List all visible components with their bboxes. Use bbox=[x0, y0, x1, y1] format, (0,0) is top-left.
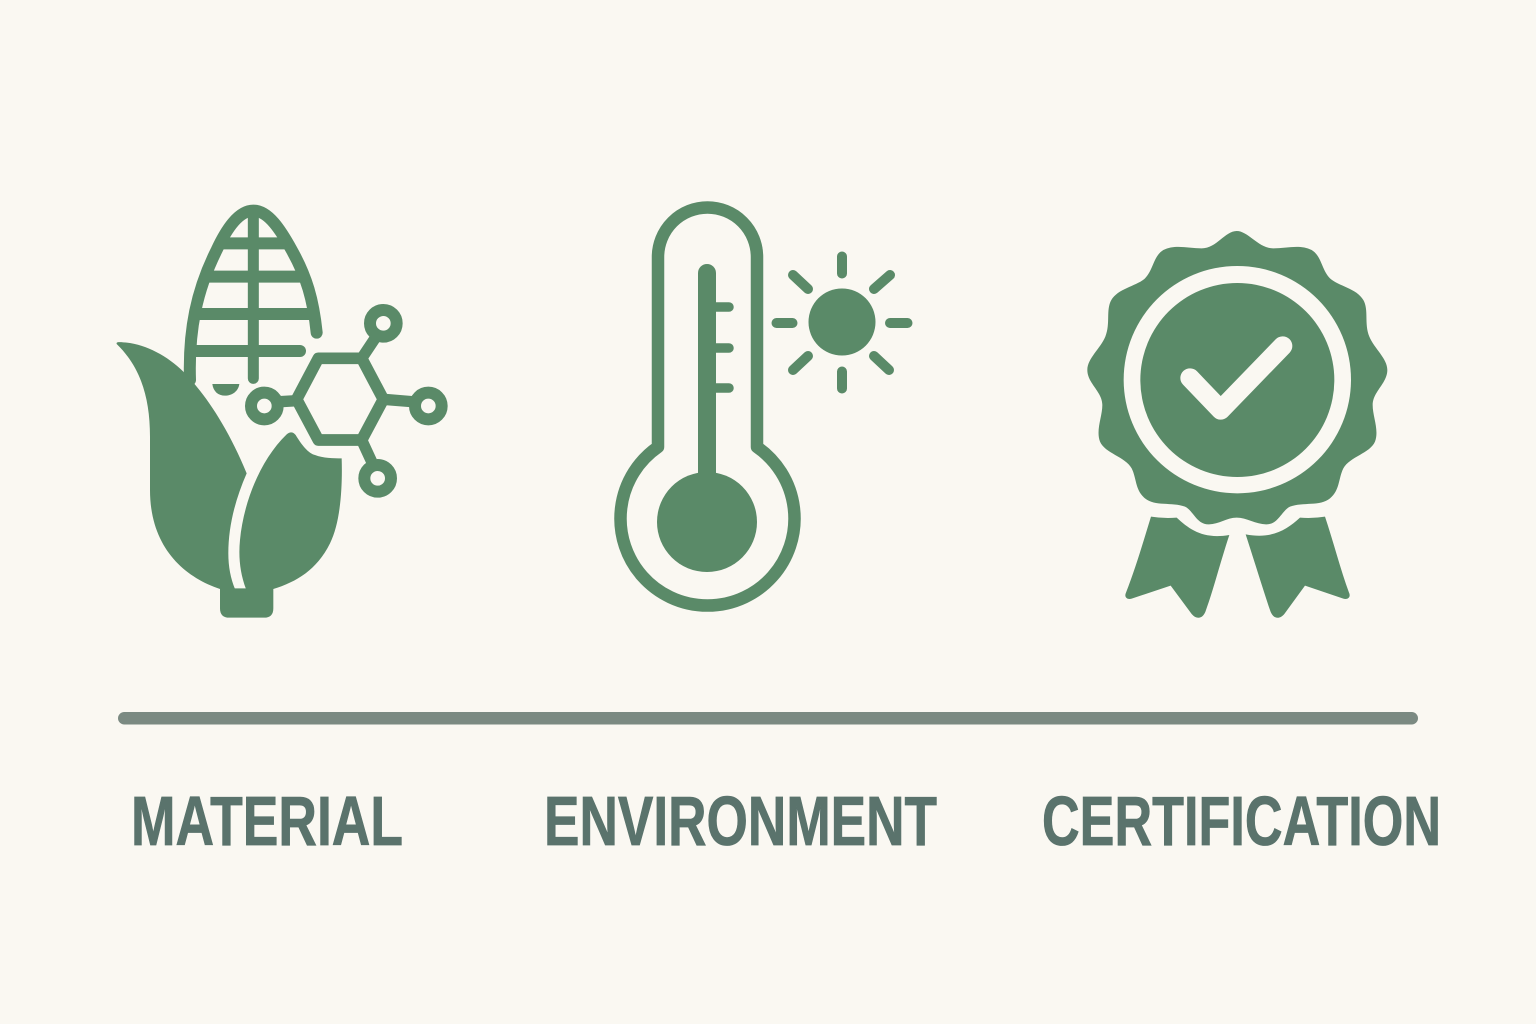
icon: certification badge bbox=[1087, 231, 1387, 618]
right leaf bbox=[239, 432, 342, 589]
icon: thermometer and sun bbox=[620, 208, 908, 606]
inner disc bbox=[1140, 283, 1334, 477]
icon: corn with molecule bbox=[117, 211, 442, 618]
right ribbon bbox=[1246, 517, 1350, 618]
corn stalk bbox=[220, 588, 273, 618]
divider line bbox=[118, 712, 1418, 724]
left leaf bbox=[117, 342, 247, 589]
white ring bbox=[1124, 266, 1351, 493]
thermometer bbox=[620, 208, 795, 606]
left ribbon bbox=[1125, 517, 1229, 618]
label: environment: ENVIRONMENT bbox=[544, 782, 937, 860]
corn cob bbox=[190, 211, 317, 396]
badge rosette bbox=[1087, 231, 1387, 524]
check mark bbox=[1190, 346, 1283, 410]
label: material: MATERIAL bbox=[131, 782, 403, 860]
molecule bbox=[251, 310, 442, 492]
sun bbox=[776, 256, 908, 388]
